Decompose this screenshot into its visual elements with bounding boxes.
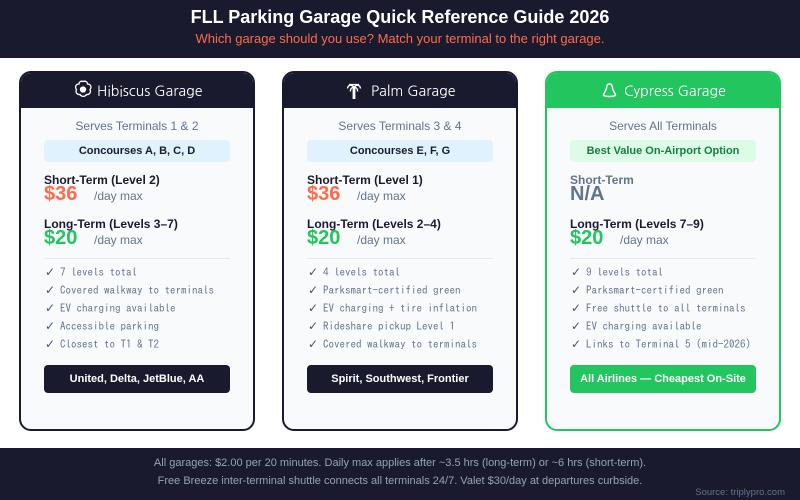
short-term price: $36: [307, 183, 340, 205]
short-term label: Short-Term: [570, 173, 634, 187]
terminals served: Serves All Terminals: [609, 119, 717, 133]
long-term label: Long-Term (Levels 2–4): [307, 217, 441, 231]
short-term price: N/A: [570, 183, 604, 205]
long-term unit: /day max: [620, 233, 669, 247]
short-term label: Short-Term (Level 1): [307, 173, 423, 187]
feature list: ✓: [308, 319, 318, 333]
header band: [0, 0, 800, 58]
feature list: ✓: [45, 283, 55, 297]
feature list: 4 levels total: [323, 267, 400, 278]
feature list: ✓: [45, 337, 55, 351]
feature list: Parksmart-certified green: [323, 285, 460, 296]
long-term price: $20: [307, 227, 340, 249]
feature list: Covered walkway to terminals: [60, 285, 214, 296]
card heading: Cypress Garage: [624, 85, 726, 99]
title: FLL Parking Garage Quick Reference Guide 2026: [191, 7, 609, 27]
feature list: 9 levels total: [586, 267, 663, 278]
feature list: Rideshare pickup Level 1: [323, 321, 455, 332]
feature list: ✓: [45, 265, 55, 279]
feature list: EV charging available: [586, 321, 702, 332]
panel: Palm Garage: [282, 71, 518, 431]
feature list: [45, 265, 214, 351]
footer note: [154, 457, 646, 487]
feature list: Covered walkway to terminals: [323, 339, 477, 350]
footer note: All garages: $2.00 per 20 minutes. Daily max applies after ~3.5 hrs (long-term) or ~6 hrs (short-term).: [154, 457, 646, 469]
feature list: ✓: [571, 319, 581, 333]
feature list: EV charging + tire inflation: [323, 303, 477, 314]
short-term price: $36: [44, 183, 77, 205]
airlines button: Spirit, Southwest, Frontier: [331, 373, 469, 385]
icon: tree: [602, 83, 616, 98]
subtitle: Which garage should you use? Match your terminal to the right garage.: [195, 31, 604, 46]
feature list: [571, 265, 751, 351]
feature list: ✓: [308, 283, 318, 297]
short-term label: Short-Term (Level 2): [44, 173, 160, 187]
airlines button: [307, 365, 493, 393]
footer note: Free Breeze inter-terminal shuttle connects all terminals 24/7. Valet $30/day at departures curbside.: [158, 475, 642, 487]
feature list: ✓: [571, 283, 581, 297]
feature list: ✓: [571, 301, 581, 315]
best value pill: [570, 140, 756, 162]
concourses pill: Concourses E, F, G: [350, 145, 450, 157]
short-term unit: /day max: [94, 189, 143, 203]
feature list: EV charging available: [60, 303, 176, 314]
airlines button: United, Delta, JetBlue, AA: [70, 373, 204, 385]
card heading: Hibiscus Garage: [97, 85, 202, 99]
feature list: Parksmart-certified green: [586, 285, 724, 296]
feature list: Accessible parking: [60, 321, 159, 332]
airlines button: [44, 365, 230, 393]
long-term unit: /day max: [357, 233, 406, 247]
concourses pill: Concourses A, B, C, D: [79, 145, 195, 157]
feature list: ✓: [308, 301, 318, 315]
source: Source: triplypro.com: [695, 487, 785, 498]
feature list: ✓: [45, 319, 55, 333]
feature list: ✓: [571, 337, 581, 351]
feature list: Closest to T1 & T2: [60, 339, 159, 350]
long-term unit: /day max: [94, 233, 143, 247]
card heading: [282, 71, 518, 108]
feature list: ✓: [45, 301, 55, 315]
feature list: ✓: [571, 265, 581, 279]
card heading: Palm Garage: [371, 85, 455, 99]
concourses pill: [44, 140, 230, 162]
feature list: [308, 265, 477, 351]
feature list: ✓: [308, 265, 318, 279]
card heading: [19, 71, 255, 108]
concourses pill: [307, 140, 493, 162]
short-term unit: /day max: [357, 189, 406, 203]
long-term label: Long-Term (Levels 7–9): [570, 217, 704, 231]
icon: flower: [74, 80, 92, 97]
airlines button: [570, 365, 756, 393]
footer band: [0, 448, 800, 500]
panel: Hibiscus Garage: [19, 71, 255, 431]
panel: Cypress Garage: [545, 71, 781, 431]
long-term price: $20: [44, 227, 77, 249]
icon: palm tree: [346, 84, 362, 99]
long-term label: Long-Term (Levels 3–7): [44, 217, 178, 231]
feature list: Free shuttle to all terminals: [586, 303, 746, 314]
card heading: [545, 71, 781, 108]
best value pill: Best Value On-Airport Option: [587, 145, 739, 157]
feature list: Links to Terminal 5 (mid-2026): [586, 339, 751, 350]
terminals served: Serves Terminals 3 & 4: [338, 119, 462, 133]
long-term price: $20: [570, 227, 603, 249]
airlines button: All Airlines — Cheapest On-Site: [580, 373, 746, 385]
feature list: ✓: [308, 337, 318, 351]
feature list: 7 levels total: [60, 267, 137, 278]
terminals served: Serves Terminals 1 & 2: [75, 119, 199, 133]
